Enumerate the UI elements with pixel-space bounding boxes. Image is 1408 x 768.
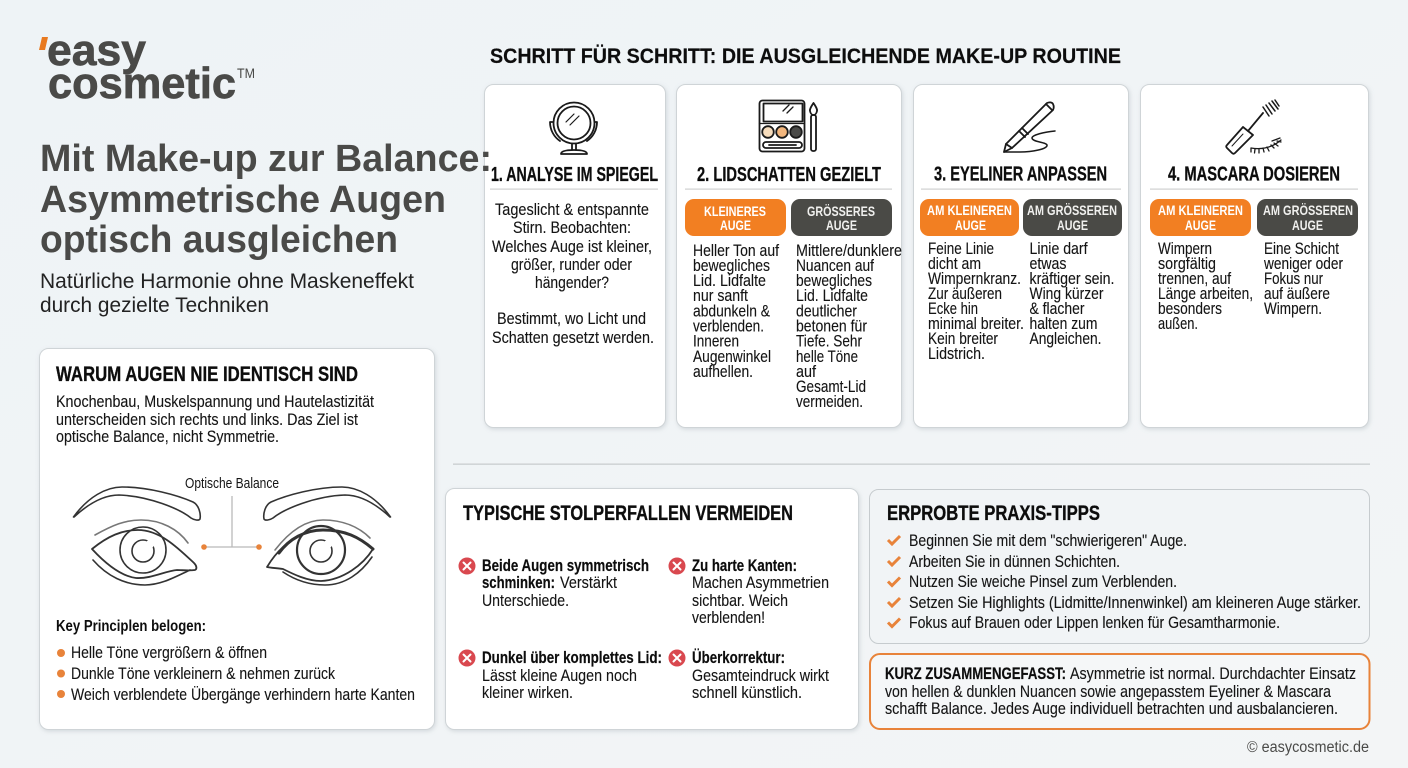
- text: mascara kleineres auge: Länge arbeiten,: [1158, 285, 1253, 303]
- text: mascara kleineres auge: sorgfältig: [1158, 255, 1216, 273]
- text: mascara kleineres auge: [1158, 240, 1253, 333]
- list: key principles: [57, 644, 415, 704]
- text: eyeliner grösseres auge: Angleichen.: [1030, 330, 1102, 348]
- heading: step 4: 4. MASCARA DOSIEREN: [1168, 164, 1340, 186]
- callout: kurz zusammengefasst: schafft Balance. Jedes Auge individuell betrachten und ausbalancieren.: [885, 700, 1338, 718]
- text: intro: unterscheiden sich rechts und links. Das Ziel ist: [56, 411, 358, 429]
- list: tips with check icons: Nutzen Sie weiche Pinsel zum Verblenden.: [909, 573, 1177, 591]
- badge: am kleineren auge: AM KLEINEREN: [927, 202, 1012, 218]
- text: intro: [56, 393, 374, 446]
- badge: am kleineren auge: AUGE: [955, 217, 986, 233]
- text: grösseres auge: betonen für: [796, 318, 867, 336]
- text: eyeliner grösseres auge: [1030, 240, 1114, 348]
- item: dunkel über komplettes lid: Dunkel über komplettes Lid:: [482, 649, 662, 667]
- text: eyeliner kleineres auge: Zur äußeren: [928, 285, 1002, 303]
- title: Mit Make-up zur Balance:: [40, 138, 492, 180]
- text: grösseres auge: bewegliches: [796, 272, 872, 290]
- text: eyeliner kleineres auge: Kein breiter: [928, 330, 998, 348]
- heading: stolperfallen: TYPISCHE STOLPERFALLEN VERMEIDEN: [463, 502, 793, 525]
- item: beide augen symmetrisch: Beide Augen symmetrisch: [482, 557, 649, 575]
- list: tips with check icons: Arbeiten Sie in dünnen Schichten.: [909, 553, 1120, 571]
- badge: am kleineren auge: AUGE: [1185, 217, 1216, 233]
- icon: table mirror: [550, 102, 597, 154]
- heading: step 3: 3. EYELINER ANPASSEN: [934, 164, 1107, 186]
- badge: am grösseren auge: AUGE: [1292, 217, 1323, 233]
- badge: grösseres auge: GRÖSSERES: [807, 203, 875, 219]
- text: mascara grösseres auge: [1263, 240, 1343, 318]
- text: kleineres auge: Lid. Lidfalte: [693, 272, 766, 290]
- heading: step 2: 2. LIDSCHATTEN GEZIELT: [697, 164, 881, 186]
- text: grösseres auge: [796, 242, 902, 411]
- item: dunkel über komplettes lid: kleiner wirken.: [482, 684, 573, 702]
- badge: am grösseren auge: AM GRÖSSEREN: [1027, 202, 1117, 218]
- text: eyeliner grösseres auge: halten zum: [1030, 315, 1098, 333]
- text: eyeliner grösseres auge: kräftiger sein.: [1030, 270, 1114, 288]
- text: grösseres auge: Mittlere/dunklere: [796, 242, 902, 260]
- list: tips with check icons: Fokus auf Brauen oder Lippen lenken für Gesamtharmonie.: [909, 614, 1280, 632]
- item: zu harte kanten: sichtbar. Weich: [692, 592, 788, 610]
- title: [40, 138, 492, 261]
- left eye and brow: [74, 487, 200, 585]
- list: key principles: Dunkle Töne verkleinern & nehmen zurück: [71, 665, 336, 683]
- item: dunkel über komplettes lid: Lässt kleine Augen noch: [482, 667, 637, 685]
- callout: kurz zusammengefasst: KURZ ZUSAMMENGEFASST:: [885, 665, 1066, 683]
- item: überkorrektur: schnell künstlich.: [692, 684, 802, 702]
- item: zu harte kanten: Zu harte Kanten:: [692, 557, 797, 575]
- text: grösseres auge: auf: [796, 363, 816, 381]
- item: überkorrektur: [668, 648, 829, 702]
- text: eyeliner grösseres auge: Linie darf: [1030, 240, 1088, 258]
- text: eyeliner grösseres auge: & flacher: [1030, 300, 1085, 318]
- badge: am kleineren auge: AM KLEINEREN: [1158, 202, 1243, 218]
- text: eyeliner kleineres auge: Wimpernkranz.: [928, 270, 1021, 288]
- logo: TM: [237, 65, 255, 81]
- panel: step 1 analyse: [484, 84, 666, 428]
- subtitle: durch gezielte Techniken: [40, 293, 269, 317]
- item: überkorrektur: Überkorrektur:: [692, 648, 785, 667]
- panel: typische stolperfallen: [446, 488, 858, 730]
- text: mascara kleineres auge: außen.: [1158, 315, 1198, 333]
- text: kleineres auge: nur sanft: [693, 287, 748, 305]
- subtitle: Natürliche Harmonie ohne Maskeneffekt: [40, 269, 414, 293]
- text: mascara grösseres auge: auf äußere: [1264, 285, 1330, 303]
- copyright: © easycosmetic.de: [1247, 739, 1369, 756]
- badge: am kleineren auge: [920, 199, 1019, 236]
- panel: step 3 eyeliner: [914, 84, 1128, 428]
- item: beide augen symmetrisch: schminken:: [482, 574, 555, 592]
- text: mascara kleineres auge: trennen, auf: [1158, 270, 1231, 288]
- item: beide augen symmetrisch: [458, 557, 649, 610]
- text: grösseres auge: Lid. Lidfalte: [796, 287, 868, 305]
- text: mascara kleineres auge: Wimpern: [1158, 240, 1212, 258]
- callout: kurz zusammengefasst: von hellen & dunklen Nuancen sowie angepasstem Eyeliner & Mascara: [885, 683, 1332, 701]
- panel: erprobte praxis-tipps: [870, 490, 1370, 644]
- item: beide augen symmetrisch: Verstärkt: [560, 574, 617, 592]
- text: step 1 body: Welches Auge ist kleiner,: [492, 238, 652, 256]
- heading: step 1: 1. ANALYSE IM SPIEGEL: [491, 164, 658, 186]
- item: zu harte kanten: [668, 557, 829, 627]
- right eye and brow: [264, 487, 390, 585]
- text: kleineres auge: Inneren: [693, 332, 739, 350]
- text: kleineres auge: [693, 242, 779, 381]
- item: dunkel über komplettes lid: [458, 649, 662, 702]
- badge: grösseres auge: [791, 199, 892, 236]
- icon: eyeliner pencil: [1004, 102, 1055, 152]
- text: grösseres auge: Gesamt-Lid: [796, 378, 866, 396]
- text: step 1 body: Stirn. Beobachten:: [513, 219, 631, 237]
- text: kleineres auge: Heller Ton auf: [693, 242, 779, 260]
- text: intro: optische Balance, nicht Symmetrie.: [56, 428, 279, 446]
- text: step 1 body: Tageslicht & entspannte: [495, 201, 649, 219]
- badge: kleineres auge: KLEINERES: [704, 203, 766, 219]
- text: key principles heading: Key Principlen belogen:: [56, 618, 206, 635]
- title: Asymmetrische Augen: [40, 179, 446, 221]
- text: kleineres auge: aufhellen.: [693, 363, 753, 381]
- badge: kleineres auge: [685, 199, 786, 236]
- text: intro: Knochenbau, Muskelspannung und Hautelastizität: [56, 393, 374, 411]
- badge: am kleineren auge: [1150, 199, 1251, 236]
- text: mascara grösseres auge: Eine Schicht: [1264, 240, 1339, 258]
- logo: cosmetic: [48, 59, 236, 108]
- text: kleineres auge: Augenwinkel: [693, 348, 771, 366]
- text: mascara grösseres auge: Fokus nur: [1264, 270, 1323, 288]
- text: grösseres auge: Tiefe. Sehr: [796, 332, 862, 350]
- text: eyeliner grösseres auge: etwas: [1030, 255, 1066, 273]
- item: zu harte kanten: verblenden!: [692, 609, 765, 627]
- text: eyeliner kleineres auge: dicht am: [928, 255, 981, 273]
- item: beide augen symmetrisch: Unterschiede.: [482, 592, 569, 610]
- logo: [39, 26, 255, 108]
- diagram: eyes with optical balance: [74, 476, 390, 585]
- text: eyeliner kleineres auge: Lidstrich.: [928, 345, 985, 363]
- panel: step 4 mascara: [1140, 84, 1368, 428]
- callout: kurz zusammengefasst: [870, 654, 1370, 729]
- item: überkorrektur: Gesamteindruck wirkt: [692, 667, 829, 685]
- list: tips with check icons: Beginnen Sie mit dem "schwierigeren" Auge.: [909, 532, 1187, 550]
- panel: step 2 lidschatten: [676, 84, 902, 428]
- title: optisch ausgleichen: [40, 219, 398, 261]
- badge: am grösseren auge: [1257, 199, 1358, 236]
- text: grösseres auge: helle Töne: [796, 348, 858, 366]
- subtitle: [40, 269, 414, 317]
- text: mascara kleineres auge: besonders: [1158, 300, 1222, 318]
- text: step 1 body: größer, runder oder: [511, 256, 632, 274]
- text: grösseres auge: vermeiden.: [796, 393, 863, 411]
- badge: am grösseren auge: AM GRÖSSEREN: [1263, 202, 1353, 218]
- badge: am grösseren auge: [1023, 199, 1122, 236]
- heading: warum augen: WARUM AUGEN NIE IDENTISCH SIND: [56, 363, 358, 386]
- diagram: eyes with optical balance: Optische Balance: [185, 476, 279, 492]
- panel: warum augen nie identisch sind: [40, 348, 434, 730]
- text: step 1 body: Schatten gesetzt werden.: [492, 329, 654, 347]
- text: mascara grösseres auge: weniger oder: [1263, 255, 1343, 273]
- icon: eyeshadow palette: [760, 100, 817, 152]
- text: eyeliner kleineres auge: Feine Linie: [928, 240, 994, 258]
- section heading: Schritt für Schritt: SCHRITT FÜR SCHRITT: DIE AUSGLEICHENDE MAKE-UP ROUTINE: [490, 43, 1121, 68]
- callout: kurz zusammengefasst: Asymmetrie ist normal. Durchdachter Einsatz: [1070, 665, 1356, 683]
- text: step 1 body: hängender?: [535, 274, 609, 292]
- badge: am grösseren auge: AUGE: [1057, 217, 1088, 233]
- text: kleineres auge: verblenden.: [693, 318, 764, 336]
- item: zu harte kanten: Machen Asymmetrien: [692, 574, 829, 592]
- heading: praxis-tipps: ERPROBTE PRAXIS-TIPPS: [887, 502, 1100, 525]
- text: eyeliner kleineres auge: Ecke hin: [928, 300, 978, 318]
- text: eyeliner kleineres auge: minimal breiter.: [928, 315, 1024, 333]
- text: eyeliner kleineres auge: [928, 240, 1024, 363]
- icon: mascara wand and lashes: [1226, 100, 1281, 154]
- list: tips with check icons: [888, 532, 1361, 632]
- text: grösseres auge: deutlicher: [796, 302, 857, 320]
- text: kleineres auge: abdunkeln &: [693, 302, 770, 320]
- text: eyeliner grösseres auge: Wing kürzer: [1030, 285, 1104, 303]
- text: step 1 body: Bestimmt, wo Licht und: [497, 310, 646, 328]
- text: kleineres auge: bewegliches: [693, 257, 770, 275]
- list: key principles: Helle Töne vergrößern & öffnen: [71, 644, 267, 662]
- badge: kleineres auge: AUGE: [720, 217, 751, 233]
- badge: grösseres auge: AUGE: [826, 217, 857, 233]
- text: step 1 body: [492, 201, 654, 347]
- list: key principles: Weich verblendete Übergänge verhindern harte Kanten: [71, 686, 415, 704]
- text: grösseres auge: Nuancen auf: [796, 257, 874, 275]
- text: mascara grösseres auge: Wimpern.: [1264, 300, 1322, 318]
- logo: easy: [47, 26, 147, 75]
